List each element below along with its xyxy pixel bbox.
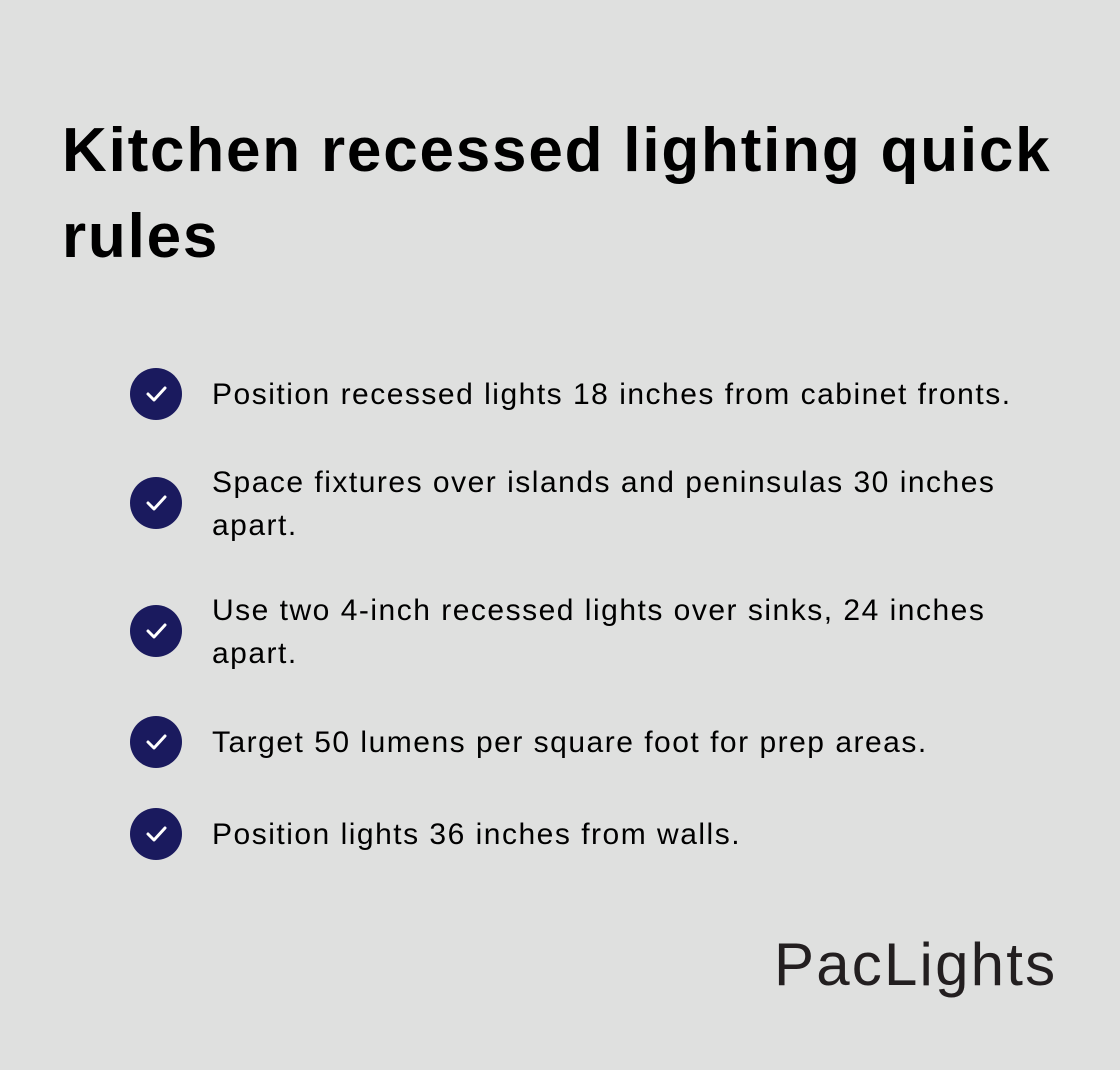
- rule 4: Target 50 lumens per square foot for prep areas.: [212, 726, 928, 759]
- rule 4: [130, 716, 928, 768]
- rule 3: Use two 4-inch recessed lights over sinks, 24 inches: [212, 594, 985, 627]
- title: rules: [62, 202, 219, 271]
- rule 3: apart.: [212, 637, 298, 670]
- icon: check: [130, 808, 182, 860]
- icon: check: [130, 716, 182, 768]
- rule 1: [130, 368, 1012, 420]
- icon: check: [130, 605, 182, 657]
- title: Kitchen recessed lighting quick: [62, 116, 1051, 185]
- rule 3: [130, 594, 985, 670]
- icon: check: [130, 368, 182, 420]
- rule 5: Position lights 36 inches from walls.: [212, 818, 741, 851]
- rule 1: Position recessed lights 18 inches from cabinet fronts.: [212, 378, 1012, 411]
- icon: check: [130, 477, 182, 529]
- rule 2: [130, 466, 995, 542]
- title: [62, 116, 1051, 271]
- rule 2: apart.: [212, 509, 298, 542]
- rule 5: [130, 808, 741, 860]
- rule 2: Space fixtures over islands and peninsulas 30 inches: [212, 466, 995, 499]
- logo: PacLights: [774, 931, 1057, 998]
